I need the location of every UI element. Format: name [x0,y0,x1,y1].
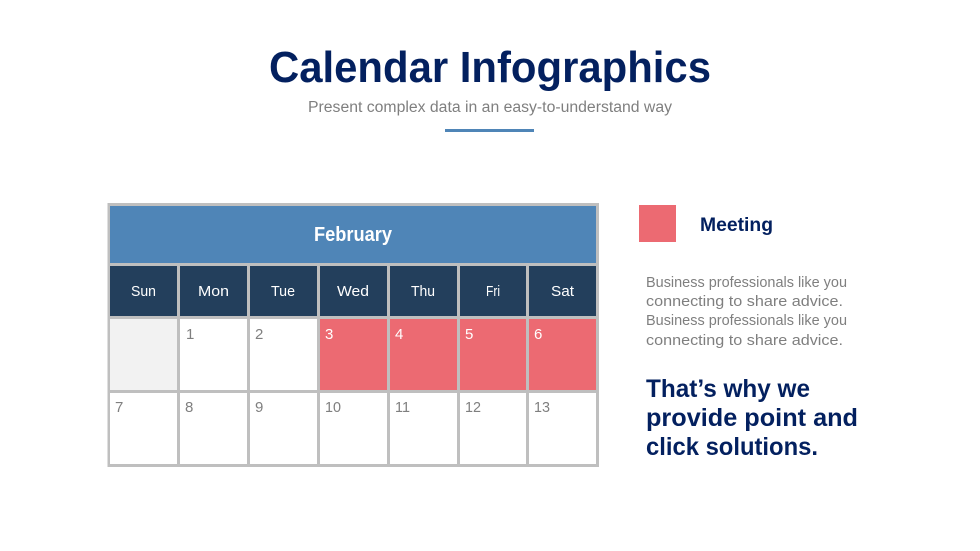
weekday row: Mon [198,283,229,300]
month header: February [314,224,393,246]
week 2: 13 [534,399,550,416]
calendar [108,203,599,467]
legend label: Meeting [700,214,773,236]
callout text [646,375,858,461]
weekday row: Sun [131,283,156,300]
body text: connecting to share advice. [646,293,843,310]
legend swatch: meeting [639,205,676,242]
week 2: 9 [255,399,263,416]
week 1: 1 [186,326,194,343]
weekday row [110,266,596,316]
title: Calendar Infographics [269,43,711,92]
week 2 [110,393,596,464]
week 1: 6 [534,326,542,343]
week 2: 12 [465,399,481,416]
weekday row: Tue [271,283,295,300]
title underline [445,129,534,132]
week 1: 4 [395,326,403,343]
weekday row: Fri [486,283,500,300]
callout text: click solutions. [646,433,818,461]
callout text: provide point and [646,404,858,432]
subtitle: Present complex data in an easy-to-understand way [308,99,672,116]
week 2: 10 [325,399,341,416]
month header [110,206,596,263]
body text: Business professionals like you [646,274,847,291]
week 2: 7 [115,399,123,416]
weekday row: Thu [411,283,435,300]
week 2: 8 [185,399,193,416]
week 1: 3 [325,326,333,343]
weekday row: Sat [551,283,575,300]
week 2: 11 [395,399,410,416]
body text: Business professionals like you [646,312,847,329]
week 1: 5 [465,326,473,343]
callout text: That’s why we [646,375,810,403]
body text: connecting to share advice. [646,332,843,349]
week 1 [110,319,596,390]
week 1: 2 [255,326,263,343]
calendar frame [108,203,599,467]
body text [646,274,847,349]
weekday row: Wed [337,283,369,300]
